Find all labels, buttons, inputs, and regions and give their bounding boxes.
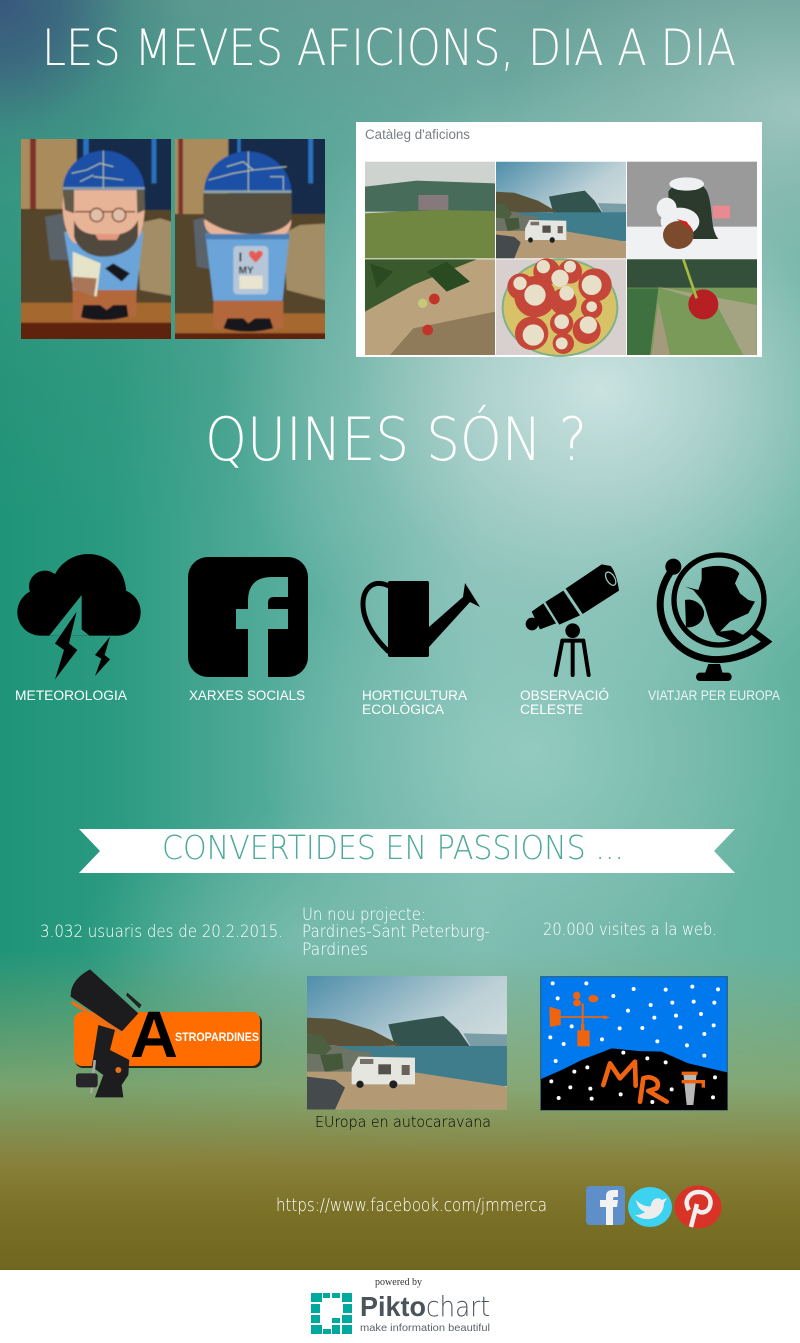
footer bar (0, 1270, 800, 1343)
text: new project: Pardines (302, 940, 368, 960)
logo: astropardines (71, 969, 262, 1097)
label: observacio celeste (520, 688, 609, 717)
piktochart tagline: make information beautiful (360, 1322, 490, 1334)
icon: watering can (363, 581, 480, 657)
icon: facebook (188, 557, 308, 677)
piktochart wordmark: Pikto (360, 1291, 426, 1322)
heading: quines son: QUINES SÓN ? (205, 404, 587, 475)
panel: photo catalogue (356, 122, 762, 357)
powered by: powered by (375, 1277, 422, 1288)
icon: globe (660, 555, 767, 681)
label: xarxes socials: XARXES SOCIALS (189, 688, 305, 703)
astropardines wordmark: STROPARDINES (175, 1032, 259, 1044)
label: horticultura ecologica (362, 688, 467, 717)
astropardines letter A: A (130, 997, 178, 1071)
photo: nesting doll, front (21, 139, 171, 339)
caption: europa en autocaravana: EUropa en autocaravana (315, 1113, 491, 1131)
telescope picture (71, 969, 142, 1097)
label: horticultura ecologica: ECOLÒGICA (362, 702, 444, 717)
photo: nesting doll, back: I (239, 251, 242, 265)
text: new project: Un nou projecte: (302, 905, 426, 925)
photo: nesting doll, back: MY (239, 265, 254, 276)
icon: telescope (526, 564, 619, 675)
text: new project: Pardines-Sant Peterburg- (302, 922, 490, 942)
piktochart logo mark (311, 1293, 352, 1334)
footer bar: chart (426, 1290, 490, 1323)
label: observacio celeste: OBSERVACIÓ (520, 688, 609, 703)
text: new project (302, 905, 490, 960)
icon: pinterest button (674, 1186, 722, 1228)
ribbon banner (79, 828, 735, 873)
label: viatjar per europa: VIATJAR PER EUROPA (648, 688, 780, 703)
link: facebook url: https://www.facebook.com/jmmerca (276, 1195, 547, 1216)
photo: campervan (307, 976, 507, 1110)
stat: web visits: 20.000 visites a la web. (543, 920, 717, 940)
catalogue photo grid (365, 162, 757, 356)
logo: meteo MR (541, 977, 727, 1110)
photo: nesting doll, back (175, 139, 325, 339)
icon: twitter button (628, 1187, 672, 1227)
icon: facebook button (586, 1186, 625, 1225)
stat: users: 3.032 usuaris des de 20.2.2015. (40, 922, 283, 942)
label: meteorologia: METEOROLOGIA (15, 688, 127, 703)
catalogue heading: Catàleg d'aficions (365, 127, 470, 142)
label: horticultura ecologica: HORTICULTURA (362, 688, 467, 703)
icon: storm cloud (17, 554, 141, 679)
label: observacio celeste: CELESTE (520, 702, 583, 717)
ribbon heading: CONVERTIDES EN PASSIONS ... (162, 828, 624, 867)
